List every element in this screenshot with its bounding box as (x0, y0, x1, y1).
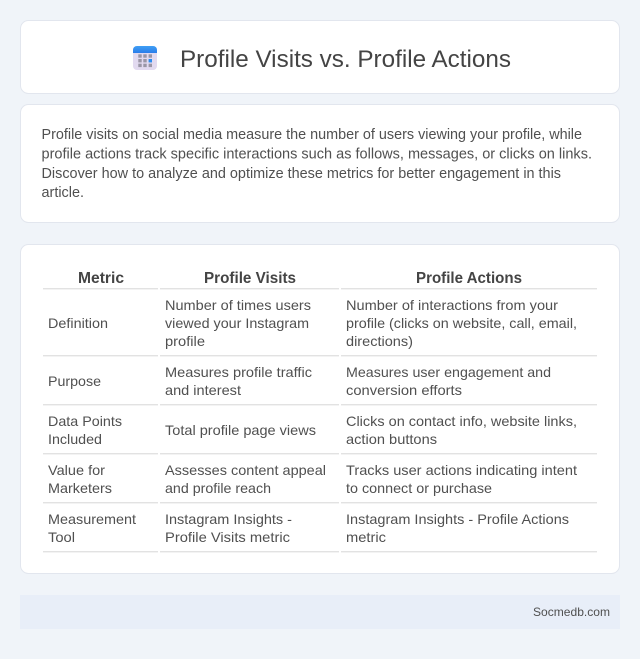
row: data points included: Data Points (48, 413, 122, 429)
row: definition: Number of interactions from your (346, 297, 558, 313)
row: purpose: conversion efforts (346, 382, 462, 398)
row: purpose: Measures user engagement and (346, 364, 551, 380)
row: value for marketers: Value for (48, 462, 105, 478)
panel: introduction: article. (42, 185, 84, 201)
row: value for marketers: Marketers (48, 480, 112, 496)
row: purpose (48, 364, 551, 398)
row: data points included: Total profile page views (165, 422, 316, 438)
row: purpose: Purpose (48, 373, 101, 389)
row: definition: Number of times users (165, 297, 311, 313)
row: measurement tool: Tool (48, 529, 75, 545)
row: data points included (48, 413, 577, 447)
row: measurement tool (48, 511, 569, 545)
row: data points included: action buttons (346, 431, 437, 447)
row: definition (48, 297, 577, 349)
icon: calendar (133, 46, 157, 70)
row: measurement tool: metric (346, 529, 386, 545)
row: measurement tool: Profile Visits metric (165, 529, 290, 545)
footer: Socmedb.com (533, 605, 610, 619)
row: data points included: Included (48, 431, 102, 447)
row: measurement tool: Instagram Insights - Profile Actions (346, 511, 569, 527)
table header: Profile Actions (416, 270, 522, 287)
row: value for marketers: Tracks user actions indicating intent (346, 462, 577, 478)
row: value for marketers: and profile reach (165, 480, 271, 496)
row: definition: Definition (48, 315, 108, 331)
row: measurement tool: Instagram Insights - (165, 511, 292, 527)
row: value for marketers (48, 462, 577, 496)
row: purpose: Measures profile traffic (165, 364, 312, 380)
row: definition: viewed your Instagram (165, 315, 309, 331)
panel: introduction: profile actions track specific interactions such as follows, messages, or clicks on links. (42, 147, 592, 163)
panel: introduction: Discover how to analyze and optimize these metrics for better engagement in this (42, 166, 561, 182)
title: Profile Visits vs. Profile Actions (180, 46, 511, 73)
table header: Profile Visits (204, 270, 296, 287)
panel: introduction: Profile visits on social media measure the number of users viewing your profile, while (42, 127, 582, 143)
row: definition: profile (clicks on website, call, email, (346, 315, 577, 331)
row: definition: directions) (346, 333, 413, 349)
row: measurement tool: Measurement (48, 511, 136, 527)
row: purpose: and interest (165, 382, 241, 398)
footer (20, 595, 620, 629)
panel: comparison table (20, 244, 620, 574)
table header (78, 270, 522, 287)
row: value for marketers: to connect or purchase (346, 480, 492, 496)
table header: Metric (78, 270, 124, 287)
row: data points included: Clicks on contact info, website links, (346, 413, 577, 429)
panel: introduction (20, 104, 620, 222)
panel: title card (20, 20, 620, 94)
row: definition: profile (165, 333, 205, 349)
row: value for marketers: Assesses content appeal (165, 462, 326, 478)
